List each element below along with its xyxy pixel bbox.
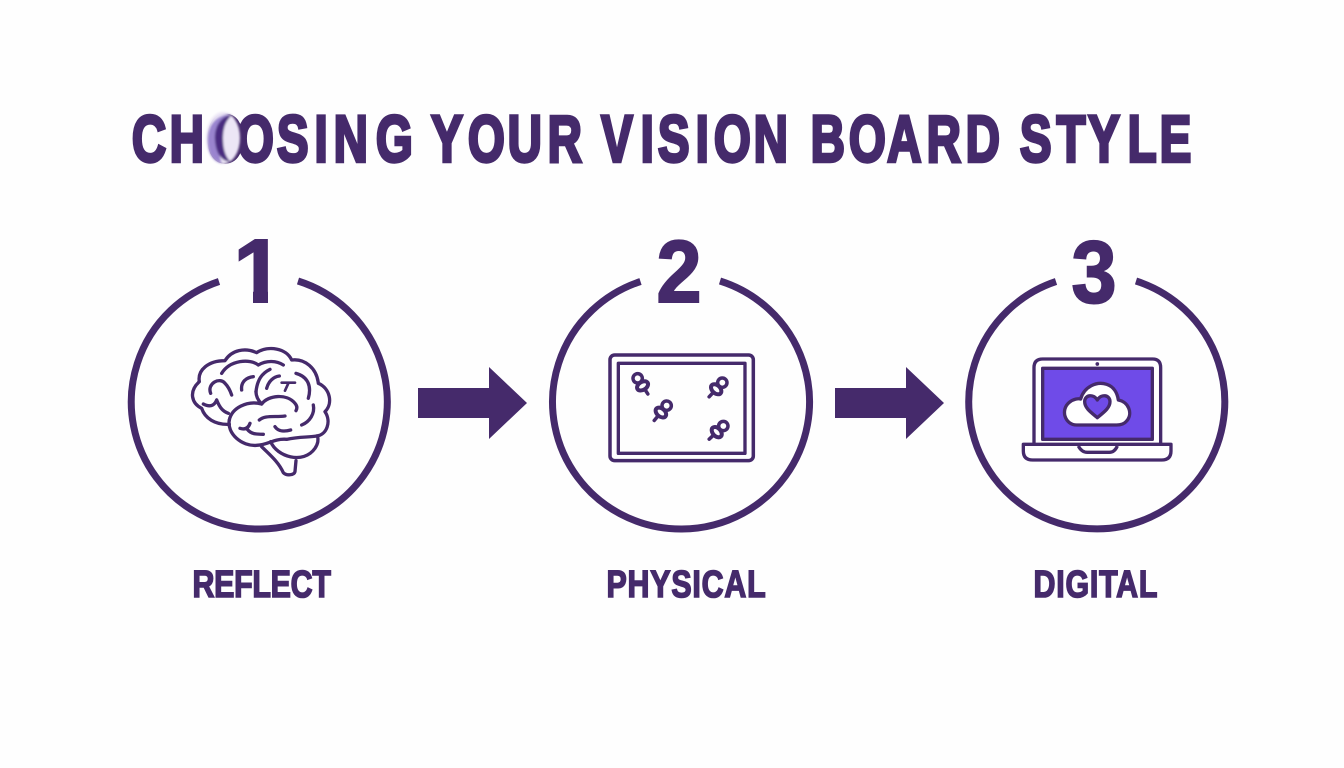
number 2: 2 [656, 222, 702, 321]
pins [630, 371, 731, 444]
arrow 2 [835, 367, 944, 439]
circle ring 3 [969, 281, 1225, 529]
number 1: 1 [233, 222, 284, 322]
number 3: 3 [1071, 222, 1117, 321]
label: physical: PHYSICAL [606, 564, 766, 606]
title: CHOOSING YOUR VISION BOARD STYLE [132, 103, 1191, 176]
label: reflect: REFLECT [192, 564, 331, 606]
circle ring 1 [131, 281, 387, 529]
step 1: reflect [131, 222, 387, 606]
icon: brain [192, 349, 330, 475]
icon: laptop with cloud and heart [1023, 359, 1171, 460]
step 2: physical [553, 222, 810, 606]
circle ring 2 [553, 281, 810, 529]
title smudge [206, 112, 240, 164]
arrow 1 [418, 367, 527, 439]
step 3: digital [969, 222, 1225, 606]
label: digital: DIGITAL [1034, 564, 1158, 606]
icon: cork board with pins [610, 355, 753, 461]
